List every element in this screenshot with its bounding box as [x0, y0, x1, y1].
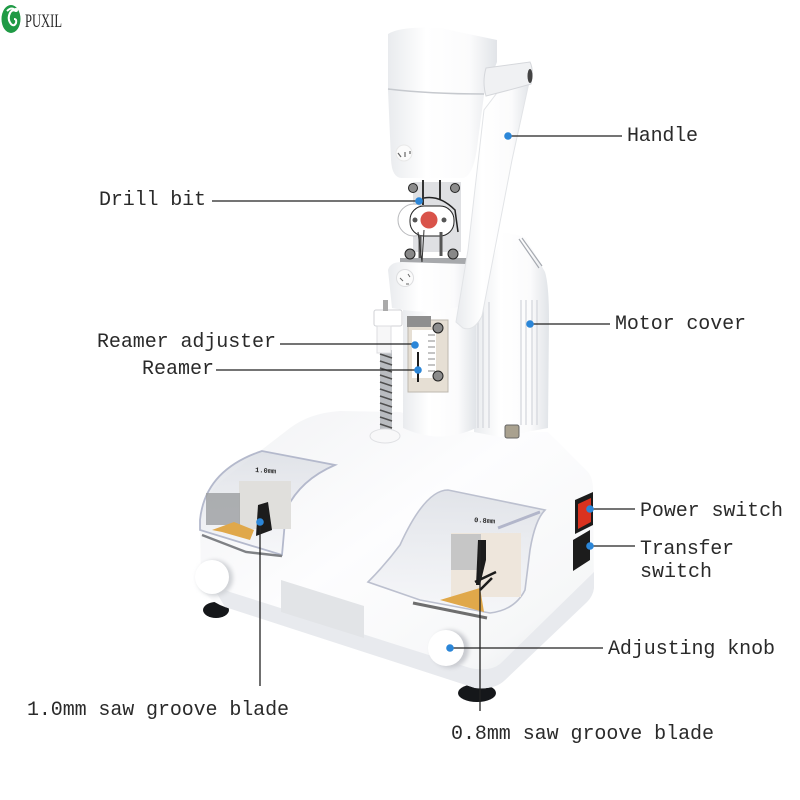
reamer plate and scale — [407, 316, 448, 392]
callout: Drill bit: Drill bit — [99, 189, 206, 212]
base front shading — [200, 565, 594, 688]
left blade window: 1.0mm: 1.0mm — [255, 467, 276, 476]
right blade window: 0.8mm: 0.8mm — [474, 517, 495, 526]
callout: Handle: Handle — [627, 125, 698, 148]
callout: Drill bit — [99, 189, 423, 212]
callout: Transfer switch: Transfer — [640, 538, 734, 561]
callout: Adjusting knob: Adjusting knob — [608, 638, 775, 661]
callout: Reamer adjuster: Reamer adjuster — [97, 331, 276, 354]
right blade window: 0.8mm — [368, 490, 545, 618]
callout: Motor cover — [526, 313, 746, 336]
column lower — [403, 300, 476, 436]
motor cover — [474, 233, 549, 438]
callout: 1.0mm saw groove blade — [27, 518, 289, 722]
callout: Reamer adjuster — [97, 331, 419, 354]
left blade window: 1.0mm — [200, 451, 335, 556]
left knob — [195, 560, 233, 596]
base body — [200, 411, 594, 688]
callout: Reamer: Reamer — [142, 358, 214, 381]
callout: 1.0mm saw groove blade: 1.0mm saw groove blade — [27, 699, 289, 722]
callout: Power switch: Power switch — [640, 500, 783, 523]
drill mechanism — [398, 180, 470, 266]
label plate — [281, 580, 364, 638]
callout: Transfer switch: switch — [640, 561, 712, 584]
callout: Handle — [504, 125, 698, 148]
callout: Reamer — [142, 358, 422, 381]
middle block — [388, 262, 476, 312]
callout: 0.8mm saw groove blade: 0.8mm saw groove blade — [451, 723, 714, 746]
threaded rod — [370, 300, 402, 443]
drill head upper casing — [388, 28, 497, 178]
power switch — [575, 492, 593, 534]
logo: PUXIL: PUXIL — [25, 11, 62, 32]
callout: Motor cover: Motor cover — [615, 313, 746, 336]
handle — [456, 62, 532, 329]
foot: rubber feet — [203, 602, 496, 702]
transfer switch — [573, 530, 590, 571]
callout: Transfer switch — [586, 538, 734, 584]
machine: lens drilling machine — [195, 28, 594, 702]
right knob — [428, 630, 469, 668]
callout: Adjusting knob — [446, 638, 775, 661]
logo: PUXIL — [2, 5, 62, 33]
